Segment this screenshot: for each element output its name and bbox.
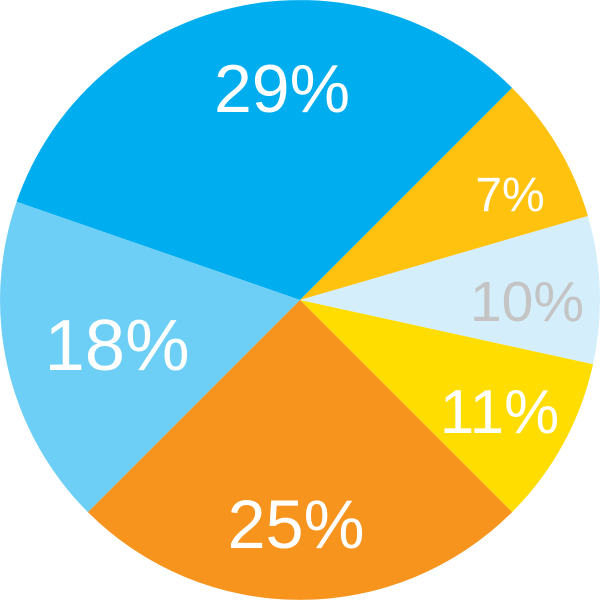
slice: 7%: 7% xyxy=(475,169,545,222)
slice: 11%: 11% xyxy=(440,378,559,447)
slice: 25%: 25% xyxy=(227,486,365,563)
slice: 11% xyxy=(300,300,593,512)
slice: 18% xyxy=(0,202,300,512)
slice: 18%: 18% xyxy=(44,305,190,386)
slice: 29%: 29% xyxy=(214,51,350,127)
slice: 10%: 10% xyxy=(470,270,584,334)
slice: 10% xyxy=(300,216,600,364)
slice: 7% xyxy=(300,88,588,300)
